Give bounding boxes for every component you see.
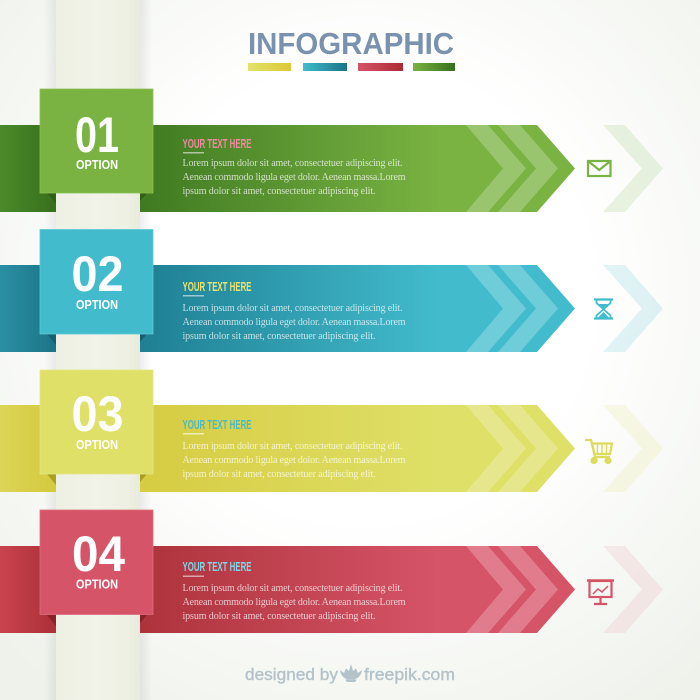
- body text: [182, 583, 406, 622]
- heading rule: [183, 576, 204, 577]
- body text: ipsum dolor sit amet, consectetuer adipiscing elit.: [182, 469, 376, 480]
- body text: Aenean commodo ligula eget dolor. Aenean massa.Lorem: [182, 597, 406, 608]
- chevrons: [466, 125, 558, 212]
- option label: OPTION: [76, 298, 118, 312]
- fold shadows: [47, 193, 147, 204]
- icon: hourglass: [594, 300, 613, 318]
- fold shadows: [47, 334, 147, 345]
- footer credit: [245, 664, 455, 684]
- heading rule: [183, 152, 204, 154]
- fold shadows: [47, 615, 147, 626]
- body text: Aenean commodo ligula eget dolor. Aenean massa.Lorem: [182, 455, 406, 466]
- outline chevron: [603, 405, 663, 492]
- number card: [40, 89, 153, 193]
- number: 04: [72, 526, 125, 582]
- footer credit: designed by: [245, 665, 339, 684]
- body text: Aenean commodo ligula eget dolor. Aenean massa.Lorem: [182, 317, 406, 328]
- outline chevron: [603, 125, 663, 212]
- panel: option 01: [0, 89, 663, 212]
- heading rule: [183, 295, 204, 296]
- title colour bars: [248, 63, 455, 71]
- body text: [182, 441, 406, 480]
- body text: Lorem ipsum dolor sit amet, consectetuer adipiscing elit.: [182, 303, 402, 314]
- vertical paper strip: [44, 0, 152, 700]
- number card: [40, 370, 153, 474]
- outline chevron: [603, 265, 663, 352]
- heading rule: [183, 433, 204, 434]
- number: 02: [72, 246, 124, 302]
- number: 03: [72, 386, 124, 442]
- body text: ipsum dolor sit amet, consectetuer adipiscing elit.: [182, 331, 376, 342]
- ribbon left stub: [0, 405, 56, 492]
- panel: option 03: [0, 370, 663, 492]
- heading: YOUR TEXT HERE: [182, 279, 252, 294]
- heading: YOUR TEXT HERE: [182, 417, 252, 432]
- icon: shopping cart: [585, 440, 612, 463]
- chevrons: [466, 405, 558, 492]
- body text: [182, 158, 406, 197]
- option label: OPTION: [76, 158, 118, 172]
- ribbon arrow: [140, 405, 575, 492]
- number card: [40, 510, 153, 614]
- chevrons: [466, 546, 558, 633]
- ribbon arrow: [140, 125, 575, 212]
- fold shadows: [47, 474, 147, 485]
- body text: Lorem ipsum dolor sit amet, consectetuer adipiscing elit.: [182, 158, 402, 169]
- ribbon left stub: [0, 546, 56, 633]
- chevrons: [466, 265, 558, 352]
- body text: [182, 303, 406, 342]
- option label: OPTION: [76, 578, 118, 592]
- ribbon left stub: [0, 125, 56, 212]
- panel: option 04: [0, 510, 663, 633]
- body text: Aenean commodo ligula eget dolor. Aenean massa.Lorem: [182, 172, 406, 183]
- icon: envelope: [588, 161, 610, 176]
- panel: option 02: [0, 230, 663, 352]
- option label: OPTION: [76, 438, 118, 452]
- outline chevron: [603, 546, 663, 633]
- number: 01: [75, 107, 119, 163]
- ribbon arrow: [140, 265, 575, 352]
- body text: Lorem ipsum dolor sit amet, consectetuer adipiscing elit.: [182, 441, 402, 452]
- footer credit: freepik.com: [364, 665, 455, 684]
- number card: [40, 230, 153, 334]
- ribbon left stub: [0, 265, 56, 352]
- body text: Lorem ipsum dolor sit amet, consectetuer adipiscing elit.: [182, 583, 402, 594]
- icon: freepik crown: [340, 664, 362, 682]
- body text: ipsum dolor sit amet, consectetuer adipiscing elit.: [182, 611, 376, 622]
- ribbon arrow: [140, 546, 575, 633]
- heading: YOUR TEXT HERE: [182, 136, 252, 151]
- icon: presentation board: [587, 580, 614, 604]
- heading: YOUR TEXT HERE: [182, 559, 252, 574]
- body text: ipsum dolor sit amet, consectetuer adipiscing elit.: [182, 186, 376, 197]
- title: INFOGRAPHIC: [248, 26, 454, 61]
